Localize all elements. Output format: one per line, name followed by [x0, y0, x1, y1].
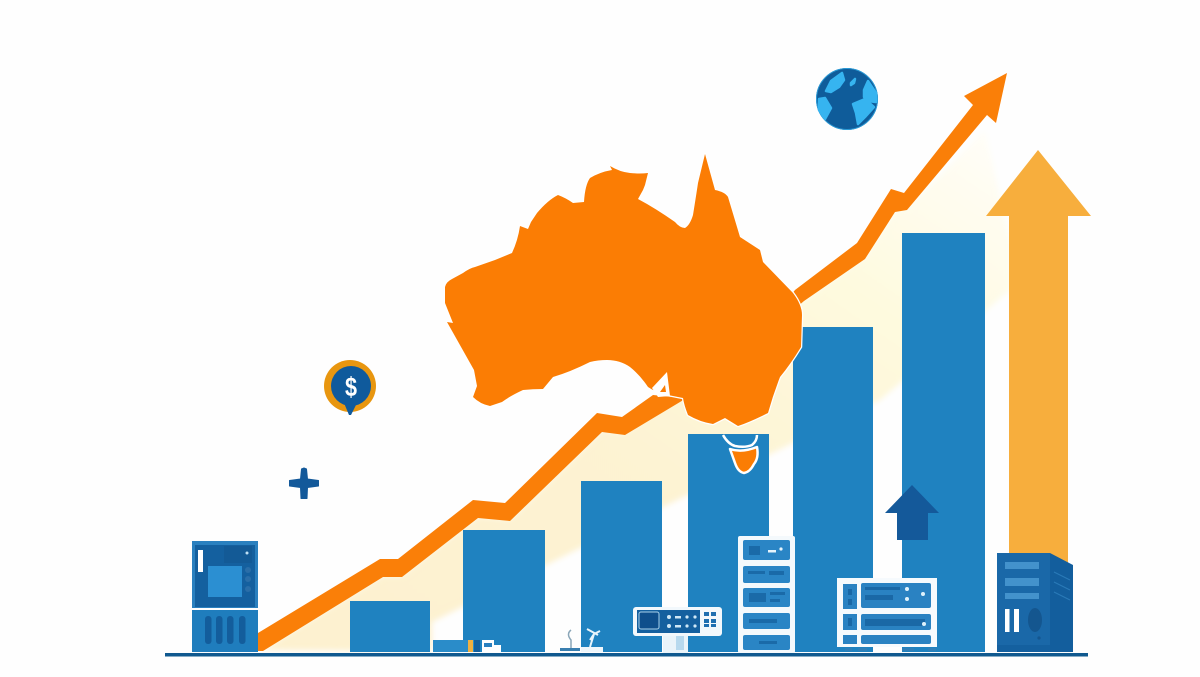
map: Australia mainland	[445, 154, 802, 426]
icon: monitor console	[633, 607, 722, 653]
map: gulf notch	[652, 372, 670, 397]
icon: small devices on baseline	[433, 640, 501, 652]
arrow: orange trend line	[258, 73, 1007, 651]
icon: dollar pin	[324, 360, 376, 415]
icon: plus sparkle	[290, 468, 318, 498]
icon: server unit	[837, 578, 937, 651]
arrow: small dark up arrow	[885, 485, 939, 540]
map: Tasmania	[723, 435, 758, 473]
icon: antenna	[560, 629, 603, 652]
bar chart	[350, 233, 985, 652]
icon: globe	[816, 68, 878, 130]
baseline	[165, 653, 1088, 656]
arrow: large amber up arrow	[986, 150, 1091, 600]
icon: left server cabinet	[192, 541, 258, 652]
icon: server rack	[738, 536, 795, 653]
icon: dollar pin: $	[345, 373, 357, 403]
icon: computer tower	[997, 553, 1073, 652]
cream area under trend line	[262, 130, 1010, 651]
